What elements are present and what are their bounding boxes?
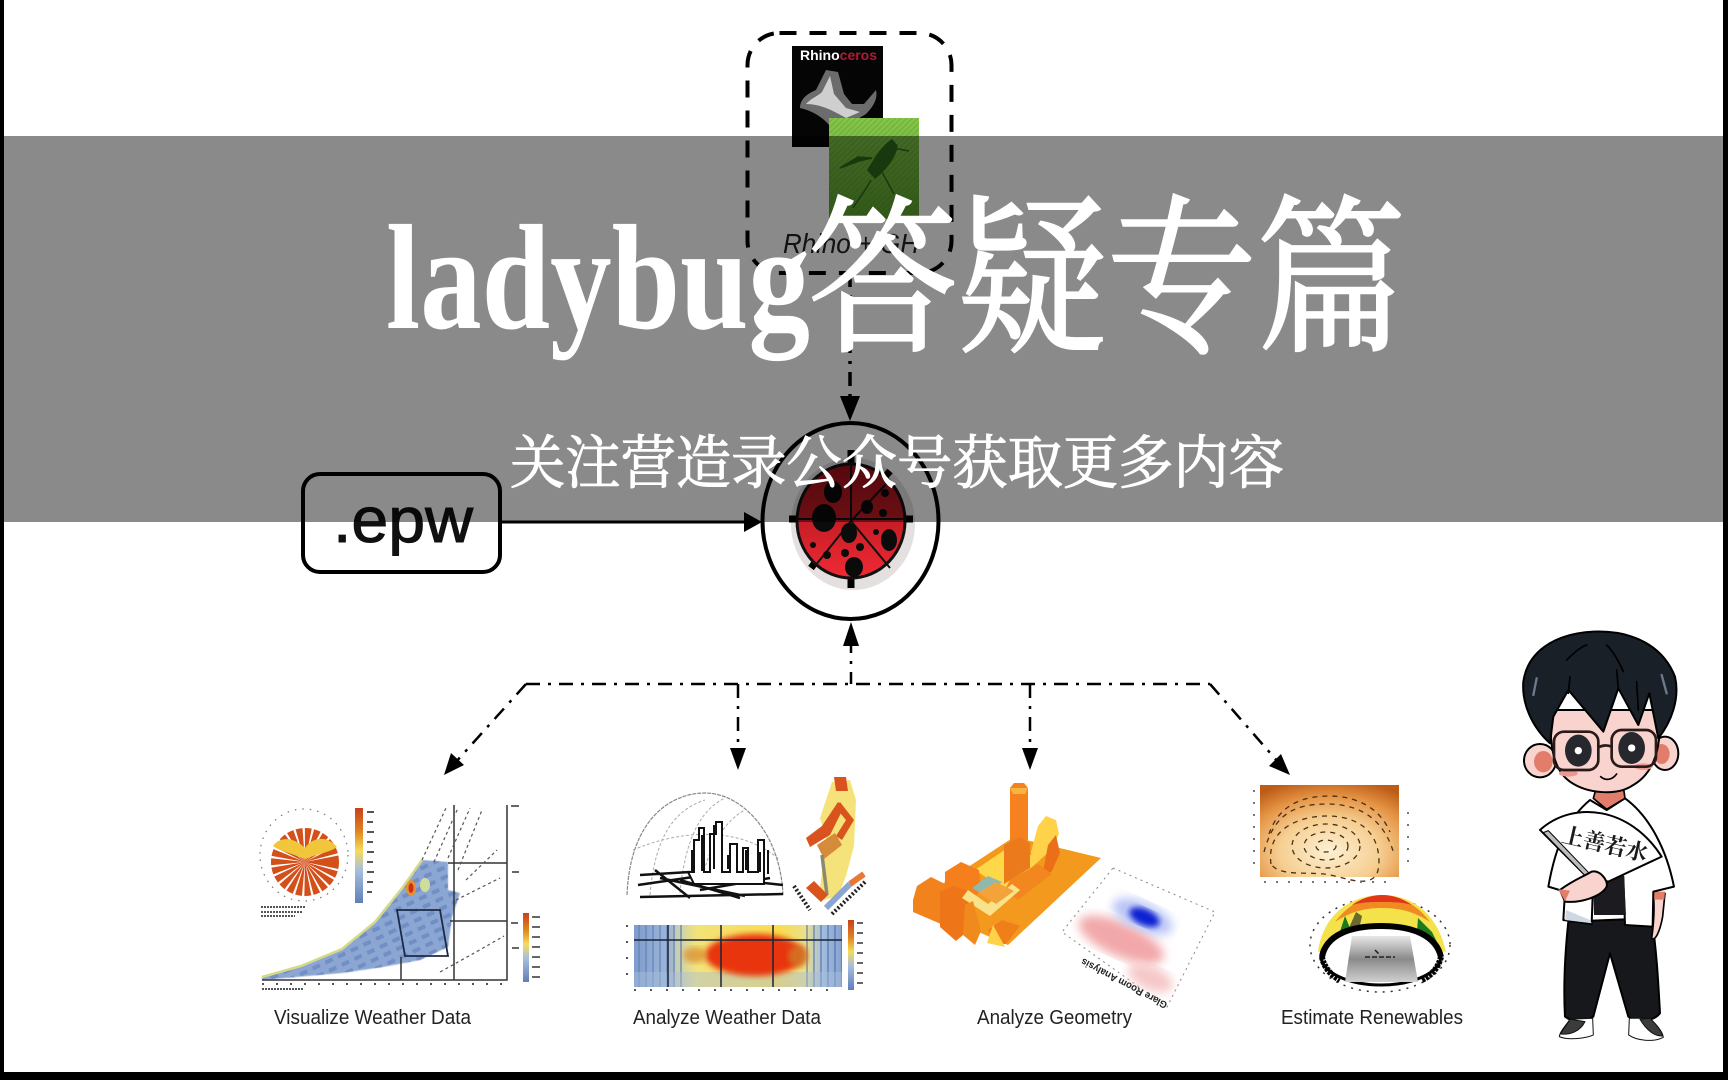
legend: heatmap colour bar (848, 920, 854, 990)
chart: psychrometric chart (262, 805, 540, 989)
chart: blue and red analysis plot (1062, 868, 1215, 1010)
label: Estimate Renewables: Estimate Renewables (1281, 1007, 1463, 1029)
arrow: to Visualize Weather Data (444, 684, 526, 775)
label: Analyze Geometry: Analyze Geometry (977, 1007, 1132, 1029)
chart: thermal person model (794, 777, 866, 914)
subtitle: 关注营造录公众号获取更多内容 (510, 431, 1284, 496)
icon: Grasshopper box (829, 118, 919, 219)
arrow: to Analyze Weather Data (730, 684, 746, 770)
icon: cartoon character with fan (1523, 632, 1678, 1040)
box: .epw file (303, 474, 500, 572)
shirt (1548, 798, 1674, 927)
panel: Rhino + GH dashed box (748, 33, 952, 273)
arrow: outputs feedback to Ladybug (843, 622, 859, 684)
icon: Rhinoceros box: Rhinoceros (800, 47, 877, 63)
mouth (1601, 774, 1617, 779)
tee (1593, 867, 1626, 915)
shoes (1559, 1018, 1663, 1040)
label: Analyze Weather Data: Analyze Weather Data (633, 1007, 822, 1029)
arrow: to Analyze Geometry (1022, 684, 1038, 770)
legend: wind rose colour bar (355, 808, 363, 903)
chart: contour plot (1254, 785, 1408, 882)
ears (1524, 744, 1556, 777)
face (1551, 710, 1660, 792)
arrow: Rhino to Ladybug (840, 273, 860, 421)
legend: psychrometric colour bar (523, 913, 529, 982)
arrow: to Estimate Renewables (1210, 684, 1290, 775)
label: plot caption (upside down): Glare Room Analysis (1079, 955, 1169, 1010)
pants (1564, 918, 1660, 1021)
arrow: epw to Ladybug (500, 512, 762, 532)
hand (1560, 871, 1607, 902)
glasses (1554, 730, 1656, 770)
title: ladybug (386, 195, 810, 361)
chart: annual heatmap (627, 920, 863, 990)
title (386, 187, 1406, 375)
icon: Ladybug target (762, 423, 938, 619)
box: .epw file: .epw (333, 484, 474, 556)
hair (1523, 632, 1676, 743)
neck (1593, 787, 1625, 809)
branch lines to four outputs (444, 684, 1290, 775)
title: 答疑专篇 (808, 187, 1406, 375)
arm (1652, 893, 1665, 939)
chart: 3D geometry radiation model (913, 783, 1101, 947)
chart: wind rose (260, 808, 374, 916)
label: Visualize Weather Data: Visualize Weather Data (274, 1007, 472, 1029)
chart: fisheye dome (1310, 895, 1450, 992)
label: Rhino + GH: Rhino + GH (783, 228, 920, 259)
fan (1540, 812, 1662, 882)
chart: sun path and city (627, 793, 783, 898)
eyes (1565, 735, 1592, 767)
panel: grey translucent banner (4, 136, 1723, 522)
icon: Rhinoceros box (792, 46, 883, 147)
fan calligraphy: 上善若水 (1559, 818, 1651, 868)
